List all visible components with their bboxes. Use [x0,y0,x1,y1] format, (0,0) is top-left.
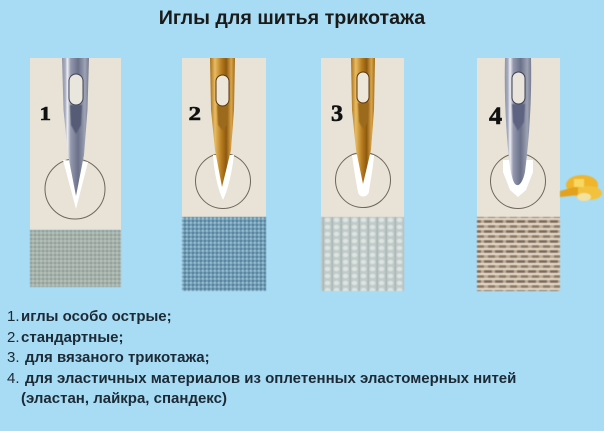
needle 3 [351,58,375,184]
white hole 1 [63,160,88,209]
text block: needle list [7,308,516,407]
item 4: 4. [7,370,20,387]
panel: needle 1 [30,58,121,287]
title: Иглы для шитья трикотажа [159,7,426,29]
puncture circle 3 [336,152,390,208]
panel: needle 2 [182,58,266,291]
needle groove 1 [70,105,82,134]
needle eye 1 [69,74,83,105]
item 4: для эластичных материалов из оплетенных эластомерных нитей [25,370,516,387]
needle eye 4 [512,72,525,104]
white hole 4 [503,160,533,197]
background card 4 [477,58,560,217]
item 4 continuation: (эластан, лайкра, спандекс) [21,390,227,407]
fabric swatch 1 [30,230,121,287]
background card 2 [182,58,266,217]
icon: tape measure [560,175,602,201]
white hole 3 [352,155,374,196]
white hole 2 [213,155,234,200]
needle eye 3 [357,72,369,103]
fabric swatch 2 [182,217,266,291]
number 1: 1 [40,102,51,125]
item 1: иглы особо острые; [21,308,172,325]
item 2: 2. [7,329,20,346]
panel: needle 3 [321,58,404,291]
needle groove 4 [512,104,525,131]
number 3: 3 [331,101,343,127]
background card 1 [30,58,121,230]
item 3: для вязаного трикотажа; [25,349,210,366]
needle 4 [505,58,531,185]
number 2: 2 [188,102,201,124]
puncture circle 1 [45,159,105,219]
item 2: стандартные; [21,329,123,346]
fabric swatch 4 [477,217,560,291]
number 4: 4 [489,102,502,130]
needle groove 3 [358,103,369,129]
puncture circle 4 [490,154,546,208]
puncture circle 2 [196,154,250,208]
background card 3 [321,58,404,217]
needle eye 2 [216,75,229,106]
item 3: 3. [7,349,20,366]
needle groove 2 [217,105,228,131]
item 1: 1. [7,308,20,325]
needle 2 [210,58,235,187]
needle 1 [62,58,89,196]
fabric swatch 3 [321,217,404,291]
panel: needle 4 [477,58,560,291]
